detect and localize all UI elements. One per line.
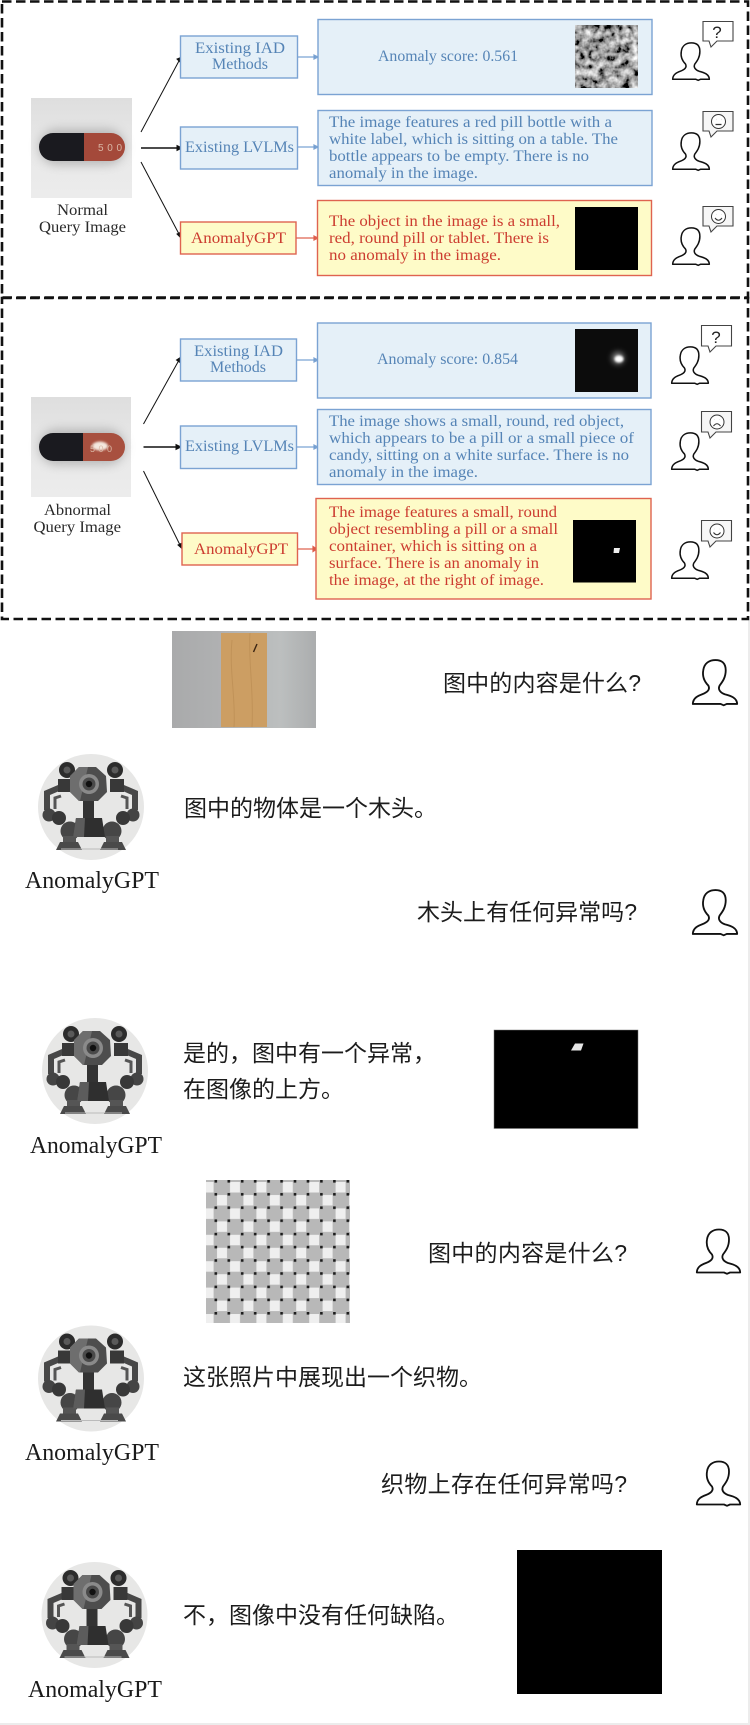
connector: IAD to result	[298, 55, 318, 59]
bot answer 3: 这张照片中展现出一个织物。	[183, 1364, 482, 1390]
arrows: from abnormal query to methods	[144, 357, 182, 549]
abnormal query image: damaged capsule: 500	[90, 444, 112, 454]
result: LVLM description: anomaly in the image.	[329, 464, 478, 481]
user question 2: 木头上有任何异常吗?	[417, 899, 637, 925]
result: anomaly score 0.854	[318, 323, 651, 398]
arrows: from query to three methods	[141, 57, 182, 238]
result: AnomalyGPT answer	[318, 200, 652, 276]
chat: wood query image	[172, 631, 316, 728]
result: LVLM description: The image shows a small, round, red object,	[329, 413, 624, 430]
box: existing IAD methods	[180, 36, 298, 78]
bot answer 2	[183, 1040, 436, 1102]
bot answer 1: 图中的物体是一个木头。	[184, 795, 437, 821]
dashed frame: abnormal	[2, 298, 748, 619]
label: AnomalyGPT 2: AnomalyGPT	[30, 1133, 162, 1159]
result: LVLM description	[318, 410, 651, 484]
result: anomaly score 0.854: Anomaly score: 0.854	[377, 351, 518, 368]
result: AnomalyGPT answer: surface. There is an anomaly in	[329, 555, 539, 572]
robot avatar 2	[42, 1018, 148, 1124]
box: existing IAD methods: Existing IAD	[194, 343, 283, 360]
robot avatar 1	[38, 754, 144, 860]
result: AnomalyGPT answer: container, which is sitting on a	[329, 538, 537, 555]
result: LVLM description: which appears to be a pill or a small piece of	[329, 430, 635, 447]
connector: AnomalyGPT to result	[296, 236, 318, 240]
result: anomaly score 0.561: Anomaly score: 0.561	[378, 48, 518, 65]
result: AnomalyGPT answer: red, round pill or tablet. There is	[329, 230, 549, 247]
label: AnomalyGPT 4: AnomalyGPT	[28, 1677, 162, 1703]
box: existing LVLMs: Existing LVLMs	[185, 438, 294, 455]
label: AnomalyGPT 1: AnomalyGPT	[25, 868, 159, 894]
icon: user 2	[693, 890, 737, 935]
mask: black with white spot	[573, 520, 636, 582]
normal query image: capsule photo	[31, 98, 132, 198]
box: existing IAD methods: Methods	[212, 56, 268, 73]
result: AnomalyGPT answer: no anomaly in the image.	[329, 247, 501, 264]
connector: AnomalyGPT to result	[298, 546, 317, 552]
panel: abnormal query comparison	[2, 298, 748, 619]
result: LVLM description: white label, which is sitting on a table. The	[329, 131, 618, 148]
caption: normal query image	[39, 202, 126, 236]
box: existing IAD methods: Existing IAD	[195, 40, 285, 57]
result: AnomalyGPT answer	[316, 498, 651, 599]
icon: user 4	[697, 1462, 740, 1506]
heatmap: noisy anomaly map	[575, 25, 638, 88]
reaction: user question: ?	[712, 23, 722, 42]
bot answer 4: 不，图像中没有任何缺陷。	[183, 1602, 459, 1628]
user question 4: 织物上存在任何异常吗?	[381, 1471, 627, 1497]
bot answer 2: 是的，图中有一个异常，	[183, 1040, 436, 1066]
connector: IAD to result	[297, 358, 318, 362]
reaction: user question: ?	[711, 328, 721, 347]
mask: empty black	[575, 207, 638, 270]
result: LVLM description	[318, 110, 652, 186]
box: existing LVLMs	[180, 127, 298, 169]
reaction: user neutral face	[673, 112, 733, 170]
reaction: user happy face	[673, 206, 733, 265]
box: existing LVLMs: Existing LVLMs	[185, 139, 294, 156]
box: existing IAD methods	[180, 339, 296, 381]
caption: abnormal query image	[34, 502, 121, 536]
dashed frame: normal	[2, 2, 748, 298]
box: existing IAD methods: Methods	[210, 359, 266, 376]
icon: user 3	[697, 1230, 740, 1274]
abnormal query image: damaged capsule	[31, 397, 131, 497]
connector: LVLMs to result	[298, 145, 318, 149]
result: AnomalyGPT answer: The object in the image is a small,	[329, 213, 560, 230]
result: LVLM description: bottle appears to be empty. There is no	[329, 148, 589, 165]
heatmap: dark with bright spot	[575, 329, 638, 392]
bot answer 2: 在图像的上方。	[183, 1076, 344, 1102]
result: anomaly score 0.561	[318, 20, 652, 94]
user question 1: 图中的内容是什么?	[443, 670, 641, 696]
label: AnomalyGPT 3: AnomalyGPT	[25, 1440, 159, 1466]
robot avatar 3	[38, 1326, 144, 1432]
robot avatar 4	[42, 1562, 148, 1668]
box: AnomalyGPT	[180, 222, 296, 254]
reaction: user question	[672, 326, 732, 384]
mask: wood anomaly	[494, 1030, 638, 1128]
box: AnomalyGPT: AnomalyGPT	[194, 541, 288, 558]
result: AnomalyGPT answer: the image, at the right of image.	[329, 572, 544, 589]
normal query image: capsule photo: 500	[98, 143, 122, 154]
faint page edge	[748, 620, 750, 1725]
connector: LVLMs to result	[297, 445, 318, 449]
box: AnomalyGPT: AnomalyGPT	[191, 230, 286, 247]
caption: normal query image: Query Image	[39, 219, 126, 236]
result: LVLM description: anomaly in the image.	[329, 165, 478, 182]
result: LVLM description: The image features a red pill bottle with a	[329, 114, 612, 131]
icon: user 1	[693, 660, 737, 705]
mask: fabric no anomaly	[517, 1550, 662, 1694]
box: AnomalyGPT	[182, 533, 298, 565]
panel: normal query comparison	[2, 2, 748, 298]
reaction: user sad face	[672, 412, 732, 470]
result: LVLM description: candy, sitting on a white surface. There is no	[329, 447, 629, 464]
user question 3: 图中的内容是什么?	[428, 1240, 627, 1266]
box: existing LVLMs	[180, 426, 296, 468]
chat: fabric query image	[206, 1180, 350, 1323]
caption: normal query image: Normal	[57, 202, 109, 219]
caption: abnormal query image: Query Image	[34, 519, 121, 536]
reaction: user happy face	[672, 520, 732, 579]
result: AnomalyGPT answer: The image features a small, round	[329, 504, 557, 521]
result: AnomalyGPT answer: object resembling a pill or a small	[329, 521, 559, 538]
reaction: user question	[673, 22, 733, 80]
caption: abnormal query image: Abnormal	[44, 502, 112, 519]
